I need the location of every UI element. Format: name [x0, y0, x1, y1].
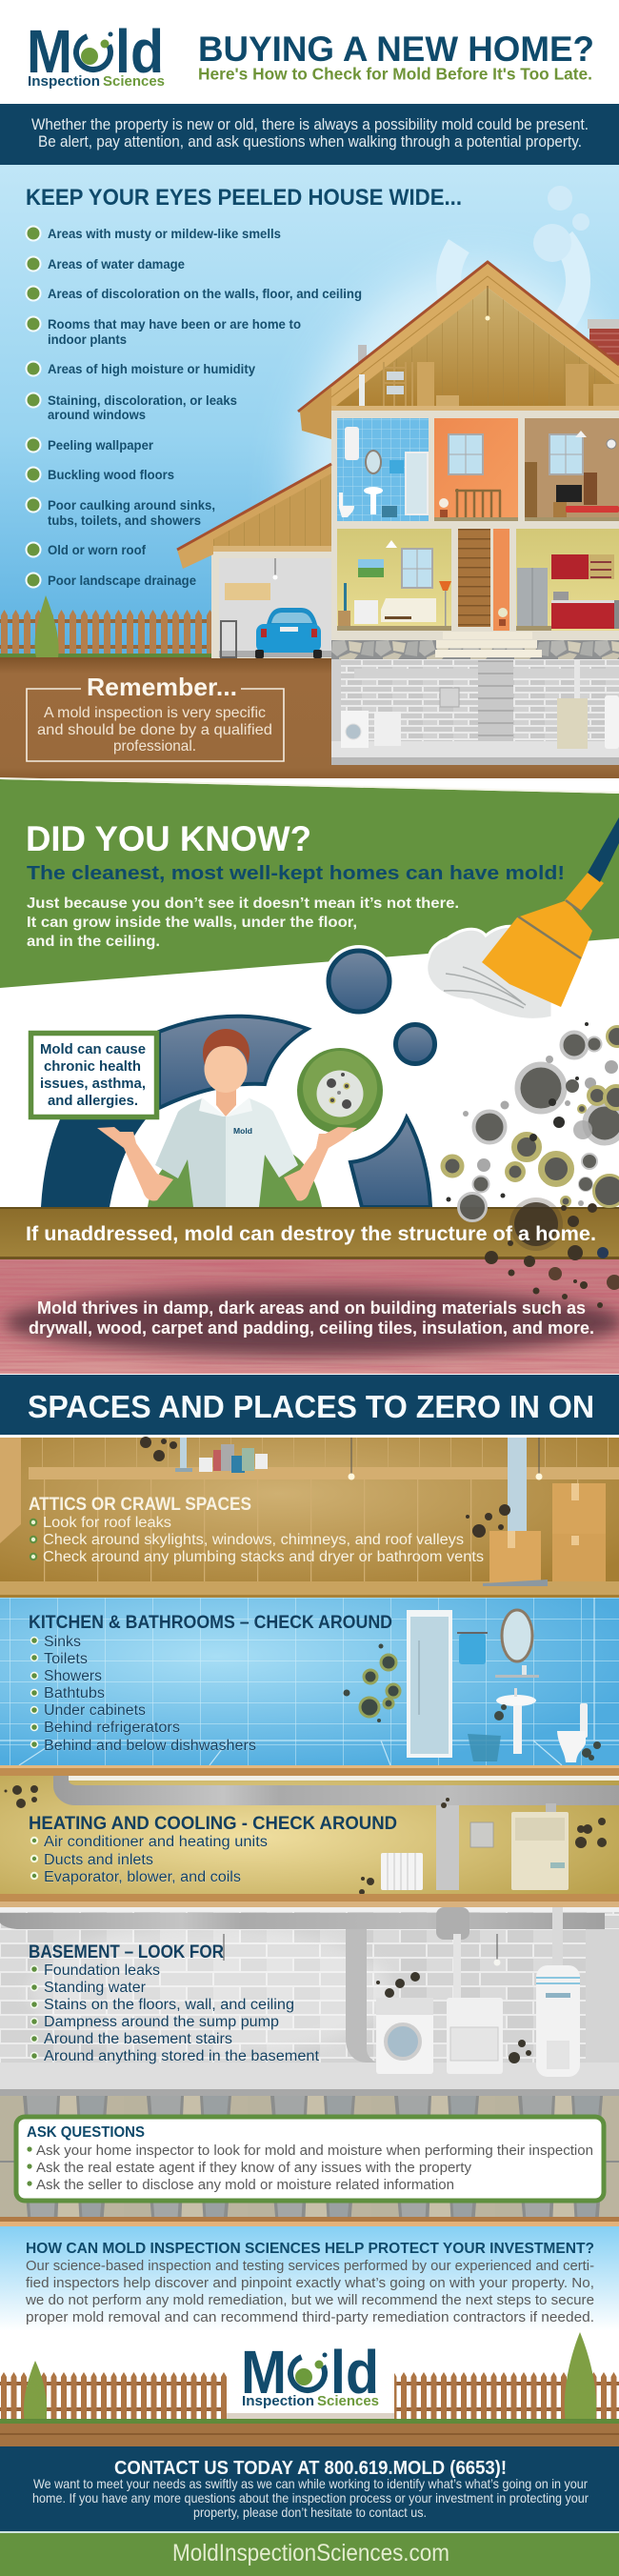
fence and tree [0, 595, 211, 658]
laundry basket [468, 1734, 501, 1761]
icon: broom and dust [427, 817, 619, 1019]
living room [337, 529, 451, 631]
question box [16, 2117, 604, 2201]
footer logo: ld [330, 2338, 379, 2406]
list: Ducts and inlets [44, 1852, 153, 1868]
list: Evaporator, blower, and coils [44, 1869, 241, 1885]
vent pipe [358, 345, 367, 362]
band background: wood panel [0, 1259, 619, 1374]
body text: It can grow inside the walls, under the floor, [27, 915, 357, 931]
body text: Just because you don’t see it doesn’t mean it’s not there. [27, 896, 459, 912]
list: Standing water [44, 1980, 146, 1996]
checklist: Rooms that may have been or are home to [48, 317, 301, 332]
body text: and in the ceiling. [27, 934, 160, 950]
body text [25, 2259, 594, 2325]
footer website bar [0, 2531, 619, 2576]
foundation stones and porch steps [331, 632, 619, 659]
garage [177, 464, 331, 658]
list: Behind refrigerators [44, 1720, 180, 1736]
chimney [588, 319, 619, 374]
text: mold thrives: drywall, wood, carpet and padding, ceiling tiles, insulation, and more. [29, 1318, 594, 1338]
list: Showers [44, 1668, 102, 1684]
list: Ask the real estate agent if they know of any issues with the property [36, 2161, 472, 2176]
list: Under cabinets [44, 1702, 146, 1719]
checklist: Poor caulking around sinks, [48, 498, 215, 513]
list [30, 1515, 484, 1565]
radiator [381, 1853, 423, 1890]
remember heading: Remember... [87, 673, 237, 701]
band background: structure warning [0, 1207, 619, 1259]
arms [97, 1127, 173, 1201]
ductwork [53, 1776, 619, 1890]
heading: HOW CAN MOLD INSPECTION SCIENCES HELP PROTECT YOUR INVESTMENT? [26, 2241, 594, 2257]
list: Around the basement stairs [44, 2031, 232, 2047]
shower [407, 1610, 452, 1758]
contact text: home. If you have any more questions about the inspection process or your investment in protecting your [32, 2491, 589, 2506]
logo: Mold Inspection Sciences: M [27, 17, 72, 86]
body text: Our science-based inspection and testing services performed by our experienced and certi- [26, 2259, 594, 2274]
watermark logo bubbles [422, 186, 605, 372]
kitchen [516, 529, 619, 631]
contact text [32, 2477, 589, 2520]
title: BUYING A NEW HOME? [198, 30, 594, 69]
panel: did you know [0, 778, 619, 1207]
body text [27, 896, 459, 950]
panel: ask questions [0, 2096, 619, 2226]
list: Check around any plumbing stacks and dryer or bathroom vents [43, 1549, 484, 1565]
list: Ask your home inspector to look for mold and moisture when performing their inspection [36, 2143, 593, 2159]
section heading band: SPACES AND PLACES TO ZERO IN ON [28, 1389, 594, 1424]
illustration: mold spores spreading [443, 1022, 619, 1315]
mold patches [360, 1655, 400, 1717]
house body [331, 411, 619, 640]
checklist: Buckling wood floors [48, 468, 174, 482]
bathroom room [337, 418, 429, 521]
electrical panel [470, 1822, 493, 1847]
contact heading: CONTACT US TODAY AT 800.619.MOLD (6653)! [114, 2458, 507, 2479]
remember text: professional. [113, 738, 196, 755]
list: Toilets [44, 1651, 88, 1667]
header panel [0, 0, 619, 104]
shirt [226, 1098, 298, 1207]
section heading band [0, 1375, 619, 1435]
list: Behind and below dishwashers [44, 1738, 256, 1754]
head [204, 1045, 248, 1093]
logo: Mold Inspection Sciences: Inspection [28, 74, 100, 90]
list [30, 1962, 320, 2064]
washer [376, 1998, 433, 2074]
intro band [0, 104, 619, 165]
heading: DID YOU KNOW? [26, 819, 311, 858]
subheading: The cleanest, most well-kept homes can have mold! [27, 862, 565, 884]
illustration: house cross-section [177, 262, 619, 765]
blue car [255, 608, 322, 658]
cardboard boxes [483, 1483, 606, 1586]
icon: petri dish [297, 1048, 383, 1134]
heading: BASEMENT – LOOK FOR [29, 1942, 224, 1962]
callout: health issues: Mold can cause [40, 1041, 146, 1057]
mirror and shelf [495, 1610, 539, 1678]
callout: health issues: and allergies. [48, 1093, 138, 1109]
checklist [27, 227, 362, 588]
list: Foundation leaks [44, 1962, 160, 1979]
heading: HEATING AND COOLING - CHECK AROUND [29, 1814, 397, 1834]
ground strip [0, 2419, 619, 2446]
mold patches [140, 1437, 510, 1538]
icon: navy spore bubbles [323, 945, 434, 1063]
remember text: A mold inspection is very specific [44, 705, 266, 721]
inspector figure [97, 1029, 357, 1207]
checklist: Staining, discoloration, or leaks [48, 393, 237, 408]
body text: fied inspectors help discover and pinpoint exactly what’s going on with your property. No, [26, 2276, 594, 2291]
logo: Mold Inspection Sciences: Sciences [103, 74, 165, 90]
panel: kitchen and bathrooms [0, 1598, 619, 1765]
remember text: and should be done by a qualified [37, 722, 272, 738]
list: Look for roof leaks [43, 1515, 171, 1531]
list: Air conditioner and heating units [44, 1834, 268, 1850]
list: Sinks [44, 1634, 81, 1650]
mold patches [4, 1785, 607, 1895]
list [27, 2143, 593, 2193]
checklist: Areas of high moisture or humidity [48, 362, 255, 376]
list: Bathtubs [44, 1685, 105, 1701]
logo arc behind inspector [41, 1016, 430, 1207]
shirt logo: Mold [233, 1126, 252, 1136]
text: structure warning: If unaddressed, mold can destroy the structure of a home. [26, 1223, 596, 1245]
list: Check around skylights, windows, chimneys, and roof valleys [43, 1532, 464, 1548]
dryer [447, 1998, 503, 2074]
panel: attics [0, 1437, 619, 1598]
contact band [0, 2446, 619, 2531]
toilet [557, 1703, 588, 1762]
panel: heating and cooling [0, 1765, 619, 1907]
intro band: Be alert, pay attention, and ask questions when walking through a potential property. [38, 133, 582, 151]
subtitle: Here's How to Check for Mold Before It's Too Late. [198, 65, 592, 84]
panel: how we help [0, 2226, 619, 2424]
heading: ASK QUESTIONS [27, 2124, 145, 2141]
contact text: We want to meet your needs as swiftly as we can while working to identify what’s what’s going on in your [33, 2477, 588, 2491]
garage roof [177, 464, 331, 569]
remember frame [27, 689, 284, 761]
soil with remember box [0, 657, 619, 795]
callout: health issues [30, 1033, 156, 1117]
orange room [434, 418, 518, 521]
logo: Mold Inspection Sciences [27, 17, 165, 90]
furnace [511, 1803, 569, 1890]
basement [331, 659, 619, 765]
floor [0, 2063, 619, 2096]
checklist: Poor landscape drainage [48, 574, 196, 588]
checklist: Peeling wallpaper [48, 438, 154, 453]
text: mold thrives: Mold thrives in damp, dark areas and on building materials such as [37, 1298, 586, 1318]
footer logo: M [241, 2338, 287, 2406]
checklist: Areas of water damage [48, 257, 185, 272]
body text: proper mold removal and can recommend third-party remediation contractors if needed. [26, 2310, 594, 2325]
remember text [37, 705, 272, 755]
text: mold thrives [29, 1298, 594, 1338]
corner wall [586, 1929, 619, 2063]
checklist: tubs, toilets, and showers [48, 513, 201, 528]
footer logo: Sciences [317, 2394, 379, 2409]
heading: KITCHEN & BATHROOMS – CHECK AROUND [29, 1613, 392, 1633]
list: Stains on the floors, wall, and ceiling [44, 1997, 294, 2013]
footer website bar: MoldInspectionSciences.com [172, 2540, 449, 2566]
hands over dish edge [316, 1127, 357, 1148]
footer logo: Inspection [242, 2394, 314, 2409]
paint jars [199, 1444, 268, 1473]
towel [457, 1632, 488, 1664]
attic storage [359, 362, 619, 407]
checklist: Areas of discoloration on the walls, floor, and ceiling [48, 287, 362, 301]
heading: ATTICS OR CRAWL SPACES [29, 1495, 251, 1515]
neck [216, 1081, 236, 1117]
bedroom [525, 418, 619, 521]
list: Ask the seller to disclose any mold or moisture related information [36, 2178, 454, 2193]
body text: we do not perform any mold remediation, but we will recommend the next steps to secure [25, 2293, 594, 2308]
sink [496, 1688, 536, 1754]
checklist: Areas with musty or mildew-like smells [48, 227, 281, 241]
mold patches [376, 1972, 531, 2063]
list: Dampness around the sump pump [44, 2014, 279, 2030]
checklist: indoor plants [48, 332, 127, 347]
list [30, 1634, 256, 1754]
stairwell [458, 529, 509, 631]
list: Around anything stored in the basement [44, 2048, 320, 2064]
panel: basement [0, 1907, 619, 2096]
heading: KEEP YOUR EYES PEELED HOUSE WIDE... [26, 185, 462, 211]
checklist: Old or worn roof [48, 543, 146, 557]
checklist: around windows [48, 408, 146, 422]
main roof and attic [298, 262, 619, 439]
panel: house-wide checklist [0, 165, 619, 743]
callout: health issues: issues, asthma, [40, 1076, 146, 1092]
list [31, 1834, 268, 1885]
contact text: property, please don’t hesitate to contact us. [193, 2506, 427, 2520]
fence and trees [0, 2332, 619, 2422]
pipes and lights [175, 1438, 543, 1531]
callout: health issues: chronic health [44, 1058, 141, 1075]
intro band: Whether the property is new or old, there is always a possibility mold could be present. [31, 116, 589, 133]
logo: Mold Inspection Sciences: ld [115, 17, 164, 86]
ducts [0, 1907, 605, 2063]
footer logo [241, 2338, 379, 2409]
water heater [536, 1965, 580, 2077]
